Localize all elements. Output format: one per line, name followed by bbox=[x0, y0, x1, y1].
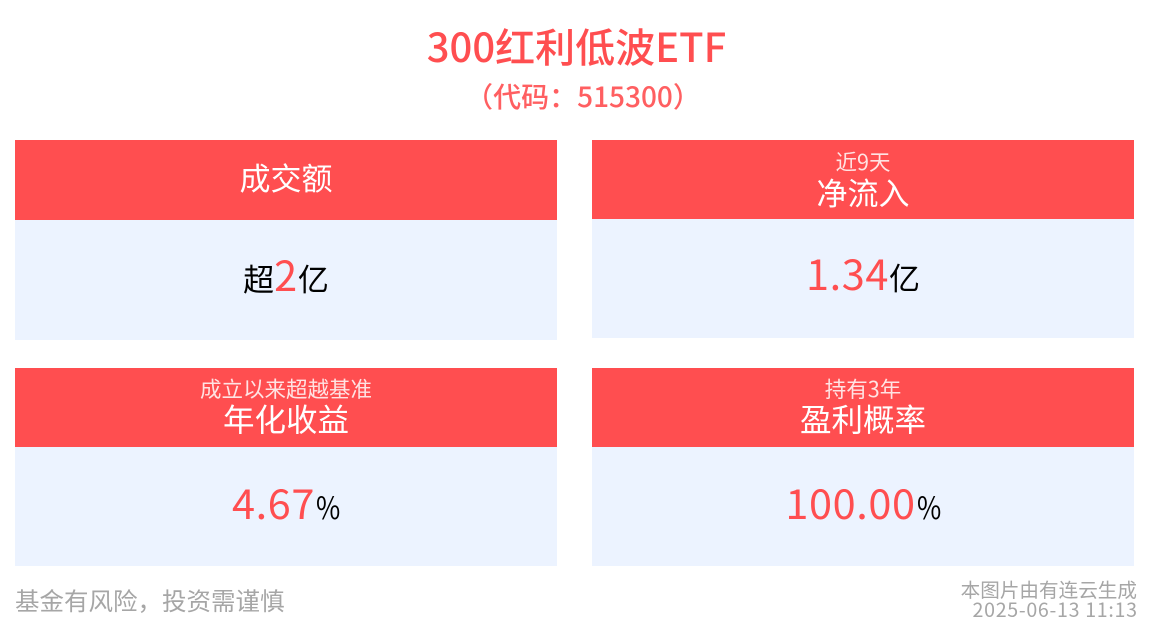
header: net inflow: 净流入 bbox=[816, 169, 910, 214]
panel: net inflow bbox=[592, 140, 1134, 338]
body: turnover value: 超2亿 bbox=[243, 243, 329, 303]
header: net inflow: 近9天 bbox=[836, 146, 890, 177]
header: win rate: 盈利概率 bbox=[800, 395, 926, 441]
header: turnover: 成交额 bbox=[240, 154, 332, 199]
body: annualized return value: 4.67 bbox=[232, 471, 315, 531]
header: turnover bbox=[15, 140, 557, 220]
body: net inflow value: 1.34亿 bbox=[806, 242, 920, 302]
body: net inflow value bbox=[592, 219, 1134, 338]
generation note bbox=[961, 574, 1138, 622]
header: win rate bbox=[592, 368, 1134, 447]
body: annualized return value bbox=[15, 447, 557, 566]
header: win rate: 持有3年 bbox=[825, 373, 901, 404]
body: win rate value: 100.00 bbox=[785, 471, 916, 531]
header: annualized return: 成立以来超越基准 bbox=[200, 373, 372, 404]
risk disclaimer: 基金有风险，投资需谨慎 bbox=[15, 583, 284, 618]
generation note: 2025-06-13 11:13 bbox=[973, 594, 1138, 622]
subtitle: （代码：515300） bbox=[465, 76, 701, 116]
header: annualized return: 年化收益 bbox=[223, 395, 349, 441]
panel: annualized return bbox=[15, 368, 557, 566]
body: win rate value: % bbox=[917, 483, 941, 528]
body: win rate value bbox=[592, 447, 1134, 566]
panel: win rate bbox=[592, 368, 1134, 566]
body: turnover value bbox=[15, 220, 557, 340]
header: annualized return bbox=[15, 368, 557, 447]
panel: turnover bbox=[15, 140, 557, 340]
title: 300红利低波ETF bbox=[427, 16, 726, 74]
header: net inflow bbox=[592, 140, 1134, 219]
body: annualized return value: % bbox=[316, 483, 340, 528]
generation note: 本图片由有连云生成 bbox=[961, 574, 1137, 603]
